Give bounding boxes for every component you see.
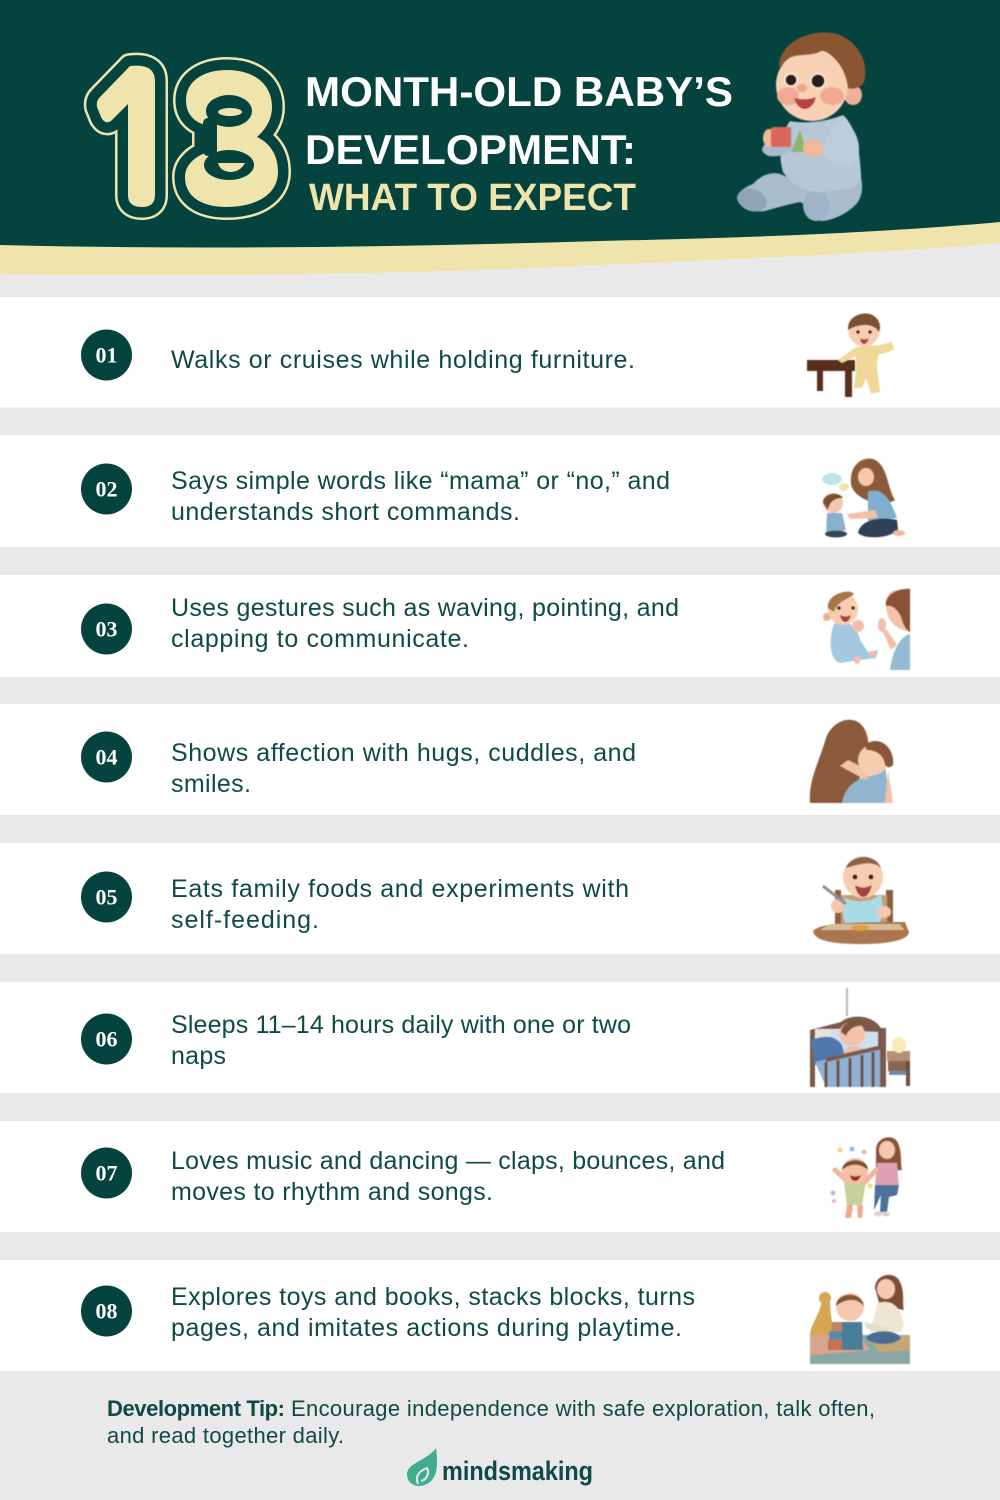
development tip bbox=[107, 1396, 875, 1448]
text: says simple words: Says simple words like “mama” or “no,” and bbox=[171, 467, 670, 495]
title bbox=[305, 68, 733, 219]
icon: baby clapping with mother bbox=[823, 589, 910, 670]
text: loves music bbox=[171, 1147, 725, 1206]
number badge 01: 01 bbox=[96, 342, 118, 368]
number badge 03 bbox=[81, 604, 132, 654]
text: eats family foods: Eats family foods and experiments with bbox=[171, 875, 629, 903]
row 4 bbox=[0, 704, 1000, 815]
row 5 bbox=[0, 843, 1000, 954]
text: eats family foods bbox=[171, 875, 629, 934]
text: loves music: moves to rhythm and songs. bbox=[171, 1178, 493, 1206]
development tip: and read together daily. bbox=[107, 1423, 344, 1448]
row 1 bbox=[0, 297, 1000, 408]
logo: mindsmaking bbox=[407, 1448, 593, 1486]
logo: mindsmaking: mindsmaking bbox=[442, 1456, 593, 1486]
row 8 bbox=[0, 1260, 1000, 1371]
number badge 06: 06 bbox=[96, 1026, 118, 1052]
text: says simple words: understands short commands. bbox=[171, 498, 520, 526]
number badge 08 bbox=[81, 1286, 132, 1336]
icon: mother talking with baby bbox=[822, 459, 905, 538]
text: says simple words bbox=[171, 467, 670, 526]
icon: baby self-feeding in high chair bbox=[813, 856, 909, 944]
text: eats family foods: self-feeding. bbox=[171, 906, 319, 934]
number badge 04: 04 bbox=[96, 744, 118, 770]
development tip: Development Tip: bbox=[107, 1396, 285, 1421]
number badge 06 bbox=[81, 1014, 132, 1064]
icon: leaf bbox=[407, 1448, 437, 1486]
text: uses gestures: clapping to communicate. bbox=[171, 625, 469, 653]
number badge 08: 08 bbox=[96, 1298, 118, 1324]
text: sleeps: Sleeps 11–14 hours daily with one or two bbox=[171, 1011, 631, 1039]
number badge 02: 02 bbox=[96, 476, 118, 502]
text: shows affection bbox=[171, 739, 636, 798]
row 7 bbox=[0, 1121, 1000, 1232]
text: sleeps: naps bbox=[171, 1042, 226, 1070]
text: loves music: Loves music and dancing — claps, bounces, and bbox=[171, 1147, 725, 1175]
icon: baby cruising at table bbox=[807, 314, 894, 397]
icon: baby hugging mother bbox=[810, 720, 893, 803]
illustration: sitting baby with toy bbox=[734, 33, 865, 221]
big number 13 bbox=[97, 66, 278, 207]
development tip: Encourage independence with safe exploration, talk often, bbox=[291, 1396, 875, 1421]
row 3 bbox=[0, 575, 1000, 677]
row 6 bbox=[0, 982, 1000, 1093]
text: explores toys: pages, and imitates actions during playtime. bbox=[171, 1314, 682, 1342]
number badge 03: 03 bbox=[96, 616, 118, 642]
number badge 01 bbox=[81, 330, 132, 380]
row 2 bbox=[0, 436, 1000, 547]
header banner bbox=[0, 0, 1000, 275]
title: MONTH-OLD BABY’S bbox=[305, 68, 733, 115]
text: sleeps bbox=[171, 1011, 631, 1070]
number badge 07: 07 bbox=[96, 1160, 118, 1186]
text: uses gestures bbox=[171, 594, 679, 653]
number badge 04 bbox=[81, 732, 132, 782]
number badge 07 bbox=[81, 1148, 132, 1198]
number badge 02 bbox=[81, 464, 132, 514]
text: uses gestures: Uses gestures such as waving, pointing, and bbox=[171, 594, 679, 622]
title: DEVELOPMENT: bbox=[305, 126, 636, 173]
number badge 05: 05 bbox=[96, 884, 118, 910]
text: walks or cruises: Walks or cruises while holding furniture. bbox=[171, 346, 635, 374]
text: explores toys: Explores toys and books, stacks blocks, turns bbox=[171, 1283, 695, 1311]
icon: baby sleeping in crib with lamp bbox=[810, 988, 910, 1087]
text: explores toys bbox=[171, 1283, 695, 1342]
title: WHAT TO EXPECT bbox=[309, 177, 636, 219]
text: shows affection: smiles. bbox=[171, 770, 251, 798]
icon: baby dancing with mother bbox=[830, 1137, 902, 1218]
number badge 05 bbox=[81, 872, 132, 922]
icon: baby playing with blocks and mother bbox=[810, 1275, 910, 1364]
text: shows affection: Shows affection with hugs, cuddles, and bbox=[171, 739, 636, 767]
